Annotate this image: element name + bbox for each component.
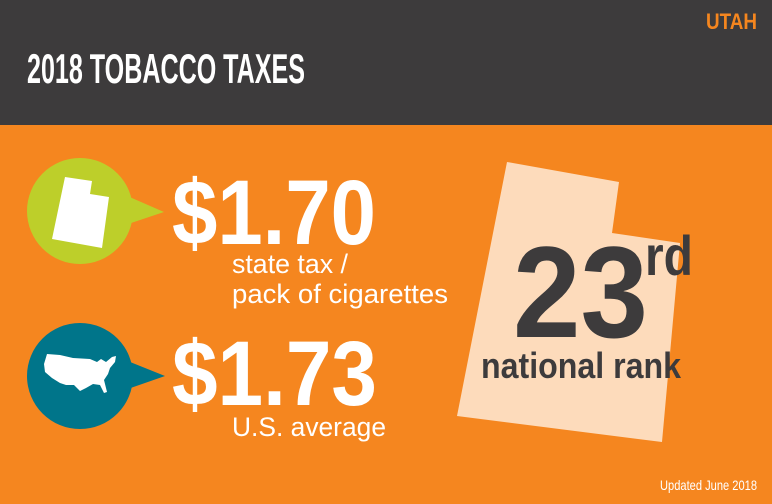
title: 2018 TOBACCO TAXES: [27, 45, 305, 92]
rank panel with utah shape: rd: [645, 224, 693, 287]
rank panel with utah shape: 23: [513, 219, 648, 365]
icon: utah speech bubble: [27, 158, 164, 264]
rank panel with utah shape: [457, 162, 693, 442]
header bar: [0, 0, 772, 125]
state tax figure: pack of cigarettes: [232, 279, 448, 309]
state tax figure: $1.70: [172, 162, 376, 264]
state tax figure: [172, 162, 448, 309]
US average figure: $1.73: [172, 323, 377, 425]
state tax figure: state tax /: [232, 249, 348, 279]
icon: us map speech bubble: [27, 323, 165, 429]
rank panel with utah shape: national rank: [481, 345, 682, 386]
US average figure: U.S. average: [232, 412, 386, 442]
state label: UTAH: [706, 9, 757, 34]
